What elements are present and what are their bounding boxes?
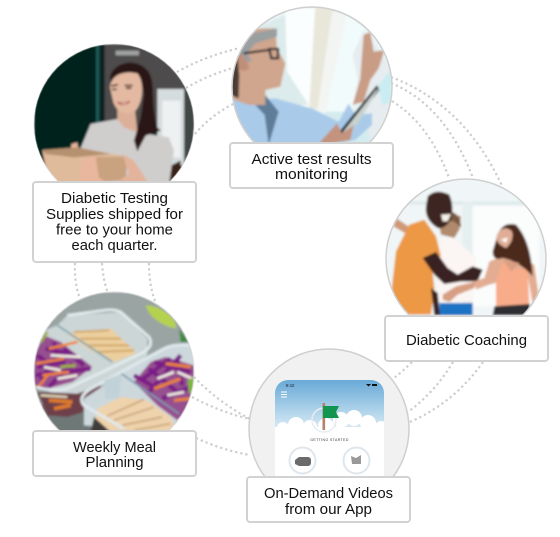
circle outline [34, 292, 194, 452]
photo: glass meal prep containers [34, 292, 194, 430]
label [230, 143, 393, 188]
status bar icons [366, 384, 377, 386]
right slaw [134, 357, 194, 420]
dotted connector arcs [75, 48, 502, 455]
clouds [277, 410, 384, 427]
label: Diabetic Testing [61, 191, 168, 207]
label: Planning [86, 455, 144, 471]
flag icon [312, 403, 339, 432]
label [385, 316, 548, 361]
circle outline [232, 7, 392, 167]
panel: on-demand videos [247, 349, 410, 522]
panel: active test results monitoring [230, 5, 393, 188]
video icon [290, 448, 316, 474]
circle outline [386, 179, 546, 339]
photo: woman handing over a parcel [34, 44, 194, 181]
circle outline [34, 44, 194, 204]
label: On-Demand Videos [264, 486, 393, 502]
label: monitoring [275, 167, 348, 183]
label: Diabetic Coaching [406, 333, 527, 349]
circle background [249, 349, 409, 509]
label: Supplies shipped for [46, 207, 183, 223]
label: each quarter. [72, 238, 158, 254]
label: free to your home [56, 222, 173, 238]
label [33, 431, 196, 476]
panel: weekly meal planning [32, 292, 196, 476]
getting started caption: GETTING STARTED [310, 438, 349, 442]
label: Weekly Meal [73, 440, 156, 456]
panel: diabetic coaching [385, 178, 548, 361]
status bar time: 9:42 [286, 383, 295, 388]
facial features [111, 85, 133, 86]
panel: diabetic testing supplies [33, 44, 196, 262]
label [247, 477, 410, 522]
label: Active test results [252, 152, 372, 168]
menu icon [281, 392, 287, 397]
meal icon [344, 448, 370, 474]
label: from our App [285, 502, 372, 518]
app phone screenshot [275, 380, 384, 476]
left slaw [34, 335, 92, 389]
photo: coach with two people laughing [387, 180, 545, 315]
photo: man with glasses holding a tablet [232, 8, 392, 142]
label [33, 182, 196, 262]
